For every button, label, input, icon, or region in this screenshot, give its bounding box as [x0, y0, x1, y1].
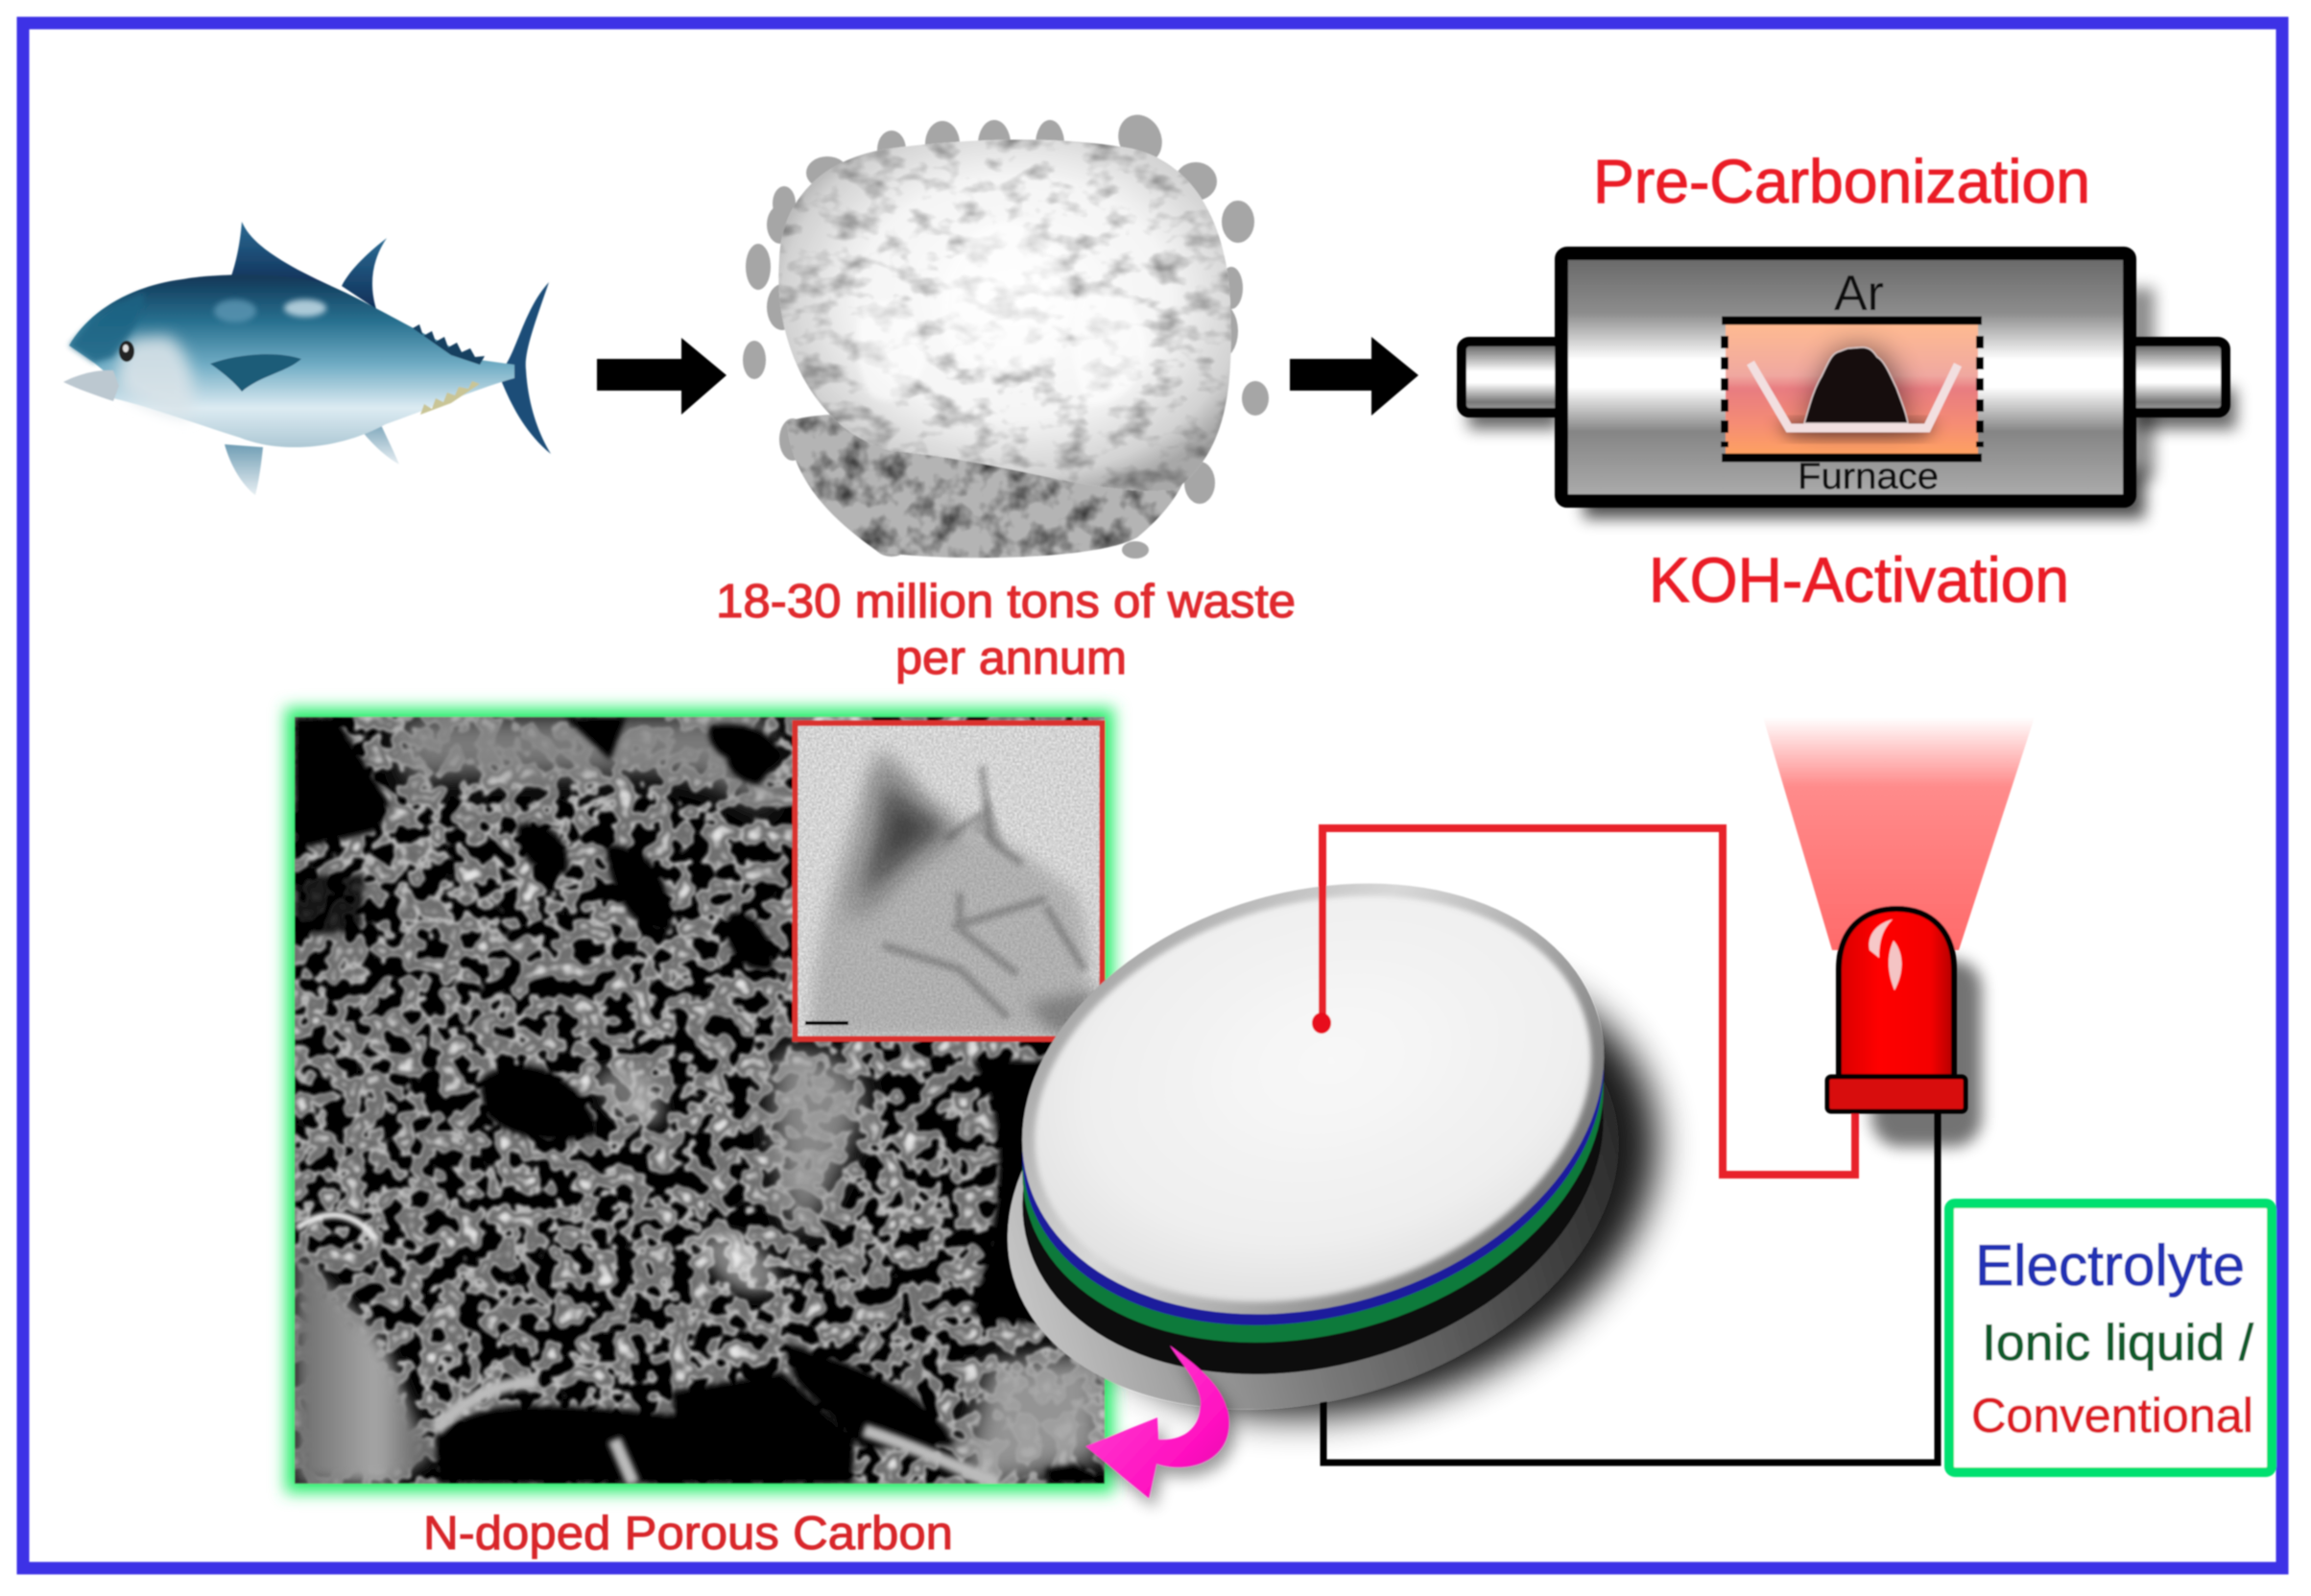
arrow: fish to scales — [597, 338, 727, 415]
label: Furnace: Furnace — [1798, 457, 1939, 497]
scale bar — [805, 1021, 848, 1025]
image: TEM inset — [795, 723, 1103, 1038]
caption: waste per annum — [716, 576, 1296, 684]
label: Ar: Ar — [1834, 266, 1884, 322]
arrow: scales to furnace — [1290, 337, 1418, 416]
caption: N-doped Porous Carbon: N-doped Porous Carbon — [423, 1508, 953, 1560]
icon: tuna fish — [63, 222, 551, 495]
icon: light beam from LED — [1763, 717, 2035, 950]
glow: green frame around micrograph — [291, 713, 1108, 1488]
label: Electrolyte: Electrolyte — [1975, 1233, 2245, 1298]
image: pile of fish scales — [743, 107, 1269, 559]
diagram: coin cell — [956, 818, 1717, 1490]
icon: red LED — [1827, 909, 1982, 1147]
panel: electrolyte box — [1949, 1203, 2272, 1472]
label: Ionic liquid: Ionic liquid / — [1982, 1315, 2253, 1371]
arrow: pink curved pointer — [1085, 1346, 1234, 1508]
wire: positive lead in red — [1312, 828, 1855, 1175]
wire: negative lead in black — [1323, 1104, 1938, 1463]
caption: waste per annum: 18-30 million tons of waste — [716, 576, 1296, 628]
caption: waste per annum: per annum — [895, 632, 1127, 684]
heading: Pre-Carbonization: Pre-Carbonization — [1593, 147, 2090, 216]
furnace chamber — [1722, 321, 1982, 458]
image: SEM micrograph of porous carbon — [295, 717, 1105, 1484]
label: Conventional: Conventional — [1971, 1389, 2253, 1442]
diagram: tube furnace — [1462, 253, 2236, 518]
heading: KOH-Activation: KOH-Activation — [1649, 544, 2069, 615]
